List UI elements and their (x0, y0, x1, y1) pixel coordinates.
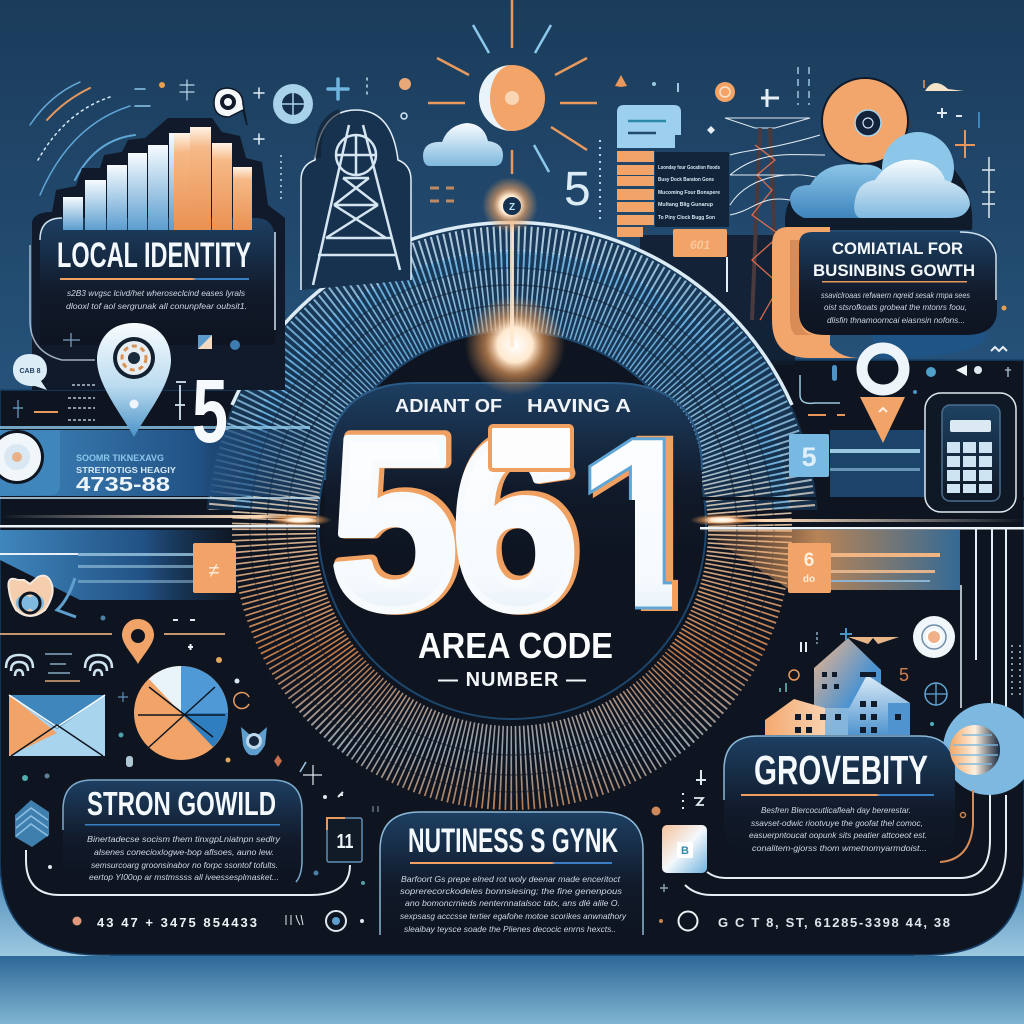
icon: wifi left (6, 655, 33, 676)
heading: GROVEBITY (754, 747, 928, 793)
center badge (318, 331, 716, 719)
body: soprerecorckodeles bonnsiesing; the fine genenpous (400, 886, 623, 896)
orange backing (772, 227, 860, 358)
body (749, 805, 927, 853)
icon: blue circle (943, 703, 1024, 795)
icon: pie chart (134, 666, 228, 760)
body text: dlooxl tof aol sergrunak all conunpfear oubsit1. (66, 301, 247, 311)
body: easuerpntoucat oopunk sits peatier attcoeot est. (749, 830, 927, 840)
blue backing (860, 300, 985, 358)
digit 1: 1 (579, 386, 716, 661)
orange dots (159, 78, 411, 119)
curved rules grovebity (707, 790, 990, 878)
flare left node (268, 514, 332, 526)
heading: BUSINBINS GOWTH (813, 261, 975, 280)
digit 5: 5 (333, 384, 461, 659)
body: conalitem-gjorss thom wmetnomyarmdoist... (752, 843, 927, 853)
heading underline (60, 278, 249, 280)
contact line right (659, 912, 950, 930)
list widget: To Piny Clock Bugg Son (658, 215, 716, 221)
main dark panel (0, 360, 1024, 955)
dark silhouette (32, 118, 285, 390)
body: ssavset-odwic riootvuye the goofat thel comoc, (751, 818, 923, 828)
icon: location pin (97, 323, 171, 437)
heading: LOCAL IDENTITY (57, 236, 251, 275)
accent curve (940, 790, 973, 862)
digit 1: 1 (573, 386, 710, 661)
panel: nutiness s gynk (380, 812, 643, 935)
left flare (0, 515, 325, 518)
cloud left (423, 123, 503, 166)
orange code box (673, 229, 727, 257)
icon: ring pin (860, 348, 905, 443)
bar chart (63, 127, 252, 230)
digit 1 (588, 436, 678, 611)
body: eertop YI00op ar mstmssss all iveessesplmasket... (89, 872, 279, 882)
panel: grovebity (724, 736, 973, 862)
speech bubble: CAB 8 (19, 368, 41, 375)
icon: orange pin small (122, 619, 154, 664)
box eleven (327, 818, 362, 862)
top glow node (482, 177, 538, 233)
dome arc (232, 222, 792, 405)
icon: striped sphere (950, 725, 1000, 775)
box eleven: 11 (336, 831, 354, 853)
orange dot (1002, 306, 1006, 310)
plus icons (180, 78, 367, 144)
outer curve grovebity (685, 795, 1006, 895)
rear cloud (790, 164, 935, 218)
small marks center right (652, 770, 706, 892)
area code label: AREA CODE (418, 625, 613, 666)
panel: local identity (30, 118, 285, 390)
number five thin: 5 (564, 163, 591, 216)
dotted rings (287, 305, 737, 755)
left band lower: ≠ (209, 560, 220, 582)
marks around buildings: 5 (899, 665, 909, 685)
icon: power pylon (725, 118, 825, 320)
icon: wifi right (85, 655, 112, 676)
small lines left (13, 382, 186, 420)
orange rows (617, 151, 654, 237)
horizontal rules (0, 633, 225, 635)
body: sexpsasg acccsse tertier egafohe motoe scorikes anwnathory (400, 911, 627, 921)
body: alsenes conecioxlogwe-bop aflsoes, auno lew. (94, 847, 274, 857)
body: Binertadecse socism them tinxgpLniatnpn sedlry (87, 834, 281, 844)
large five: 5 (192, 362, 228, 462)
dashed line (280, 155, 282, 200)
body text (66, 288, 247, 311)
panel: commercial for business growth (772, 227, 997, 358)
marks around buildings (780, 628, 966, 818)
right flare (700, 519, 1024, 522)
number label: — NUMBER — (438, 669, 586, 691)
small orange dashes (430, 188, 454, 201)
dotted right (1012, 645, 1020, 695)
list widget (617, 105, 729, 292)
list widget: Busy Dock Baraton Gons (658, 177, 714, 183)
icon: calculator (925, 393, 1016, 512)
body: ssaviclroaas refwaern nqreid sesak rmpa sees (821, 290, 971, 300)
body: ano bomoncrnieds nenternnatalsoc tatx, ans dlé alile O. (405, 898, 620, 908)
body: Barfoort Gs prepe elned rot woly deenar made enceritoct (401, 874, 621, 884)
digit 6: 6 (451, 386, 579, 661)
list widget: Multang Blig Gunarup (658, 202, 714, 208)
icon: orange disc with cloud (785, 78, 972, 230)
badge top line: ADIANT OF (395, 396, 502, 416)
body: sleaibay teysce soade the Plienes decocic enrns hexcts.. (404, 924, 616, 934)
band left: 4735-88 (76, 474, 170, 496)
panel outline (30, 245, 95, 360)
underline (410, 862, 612, 864)
list underline (45, 680, 80, 682)
app tile: B (681, 845, 689, 857)
panel body (40, 218, 275, 345)
badge top line right: HAVING A (527, 396, 631, 416)
icon: circular dial (0, 430, 44, 484)
contact line left: 43 47 + 3475 854433 (97, 915, 258, 930)
heading: COMIATIAL FOR (832, 239, 963, 258)
body (400, 874, 627, 934)
dark cloud backing (785, 134, 972, 230)
sun rays (428, 0, 597, 174)
contact line left (72, 911, 364, 931)
small dots bottom left (48, 865, 365, 885)
flare right node (690, 514, 754, 526)
heading: NUTINESS S GYNK (408, 822, 618, 860)
right vertical lines (976, 528, 1006, 720)
contact line right: G C T 8, ST, 61285-3398 44, 38 (718, 915, 950, 930)
phone text: SOOMR TIKNEXAVG (76, 453, 164, 464)
list widget: Loonday four Gocation floods (658, 165, 720, 171)
short vertical (960, 585, 962, 708)
decorative arcs top left (30, 82, 150, 195)
icon: envelope (9, 695, 105, 756)
right band lower: 6 (804, 550, 814, 571)
orange square (788, 543, 831, 593)
dark zone behind list and power tower (640, 235, 795, 365)
panel body (63, 780, 302, 880)
dark square ornament (63, 333, 240, 350)
icon: fox (241, 727, 267, 755)
right band lower: do (803, 574, 815, 585)
right band lower (700, 527, 1024, 593)
underline (822, 281, 967, 282)
icon: search bubble (214, 88, 247, 125)
center glow (465, 295, 565, 395)
dark card (799, 232, 997, 335)
list widget: Mucoming Four Bonspere (658, 190, 720, 196)
corner glow left (0, 840, 110, 956)
icon: globe (273, 84, 313, 124)
sun icon (428, 0, 597, 174)
icon: tower (301, 110, 411, 290)
header card (617, 105, 681, 148)
band left: STRETIOTIGS HEAGIY (76, 465, 176, 475)
digit 5: 5 (330, 386, 458, 661)
ray ring: upper extension (208, 226, 815, 510)
right band upper (700, 430, 1024, 500)
right band upper: 5 (801, 442, 817, 472)
orange square (193, 543, 236, 593)
panel: strong growth (15, 780, 350, 895)
body (821, 290, 971, 325)
rear blue circle (882, 132, 954, 204)
dotted vertical (599, 140, 601, 220)
body: Besfren Blercocutlicafleah day bererestar. (761, 805, 911, 815)
top-right small marks (615, 67, 995, 218)
outer curve (26, 850, 350, 895)
icon: buildings (765, 638, 910, 735)
corner glow right (914, 840, 1024, 956)
underline (741, 794, 934, 796)
front cloud (854, 160, 970, 218)
list widget: 601 (690, 238, 710, 252)
radial dome (206, 222, 818, 836)
body (87, 834, 281, 882)
top glow node: Z (509, 202, 515, 213)
body: semsurcoarg groonsinabor no forpc ssontof tofults. (91, 860, 278, 870)
small squiggle (991, 347, 1007, 351)
small symbols right (800, 365, 1011, 415)
heading (813, 239, 975, 280)
left band lower (0, 525, 320, 600)
underline (85, 824, 280, 826)
list lines (45, 654, 72, 673)
dark rows (655, 152, 729, 227)
body: dlisfin thnamoorncai eiasnsin nofons... (827, 315, 965, 325)
ray ring: main rays (274, 292, 750, 768)
arc lines (30, 82, 80, 125)
small marks mid left (22, 616, 378, 812)
speech bubble (13, 354, 47, 390)
chevrons (15, 800, 49, 847)
app tile (662, 825, 707, 873)
digit 6: 6 (454, 384, 582, 659)
body text: s2B3 wvgsc lcivd/het wheroseclcind eases lyrals (67, 288, 246, 298)
heading: STRON GOWILD (87, 785, 276, 822)
body: oist stsrofkoats grobeat the mtonrs foou, (824, 302, 967, 312)
band left (0, 426, 330, 499)
icon: mascot (8, 576, 76, 617)
ray ring: upper mid (234, 251, 790, 510)
icon: target (913, 616, 955, 658)
floor gradient (0, 955, 1024, 1024)
vertical light beam (510, 222, 514, 347)
